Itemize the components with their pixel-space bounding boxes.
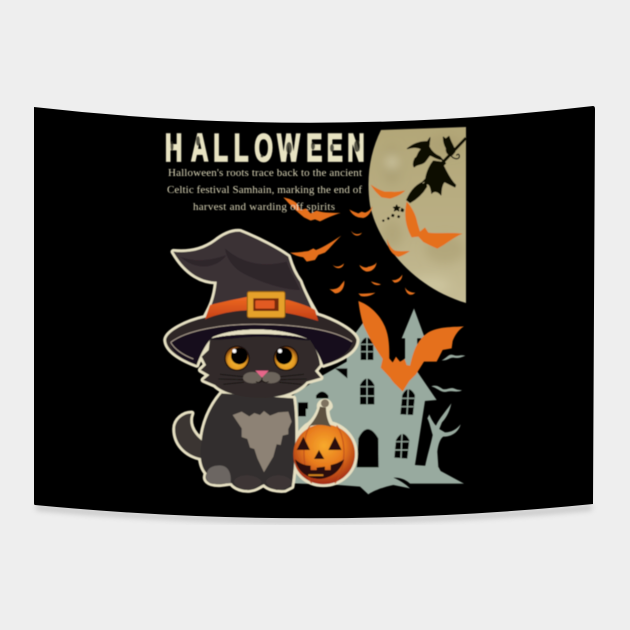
sticker outline (166, 232, 357, 490)
hat shadow on head (210, 334, 310, 340)
small bats (329, 231, 415, 296)
witch hat cone (173, 232, 317, 320)
head (201, 334, 321, 398)
jack-o-lantern face (295, 437, 344, 479)
tapestry panel (34, 106, 595, 518)
title: HALLOWEEN (165, 126, 365, 169)
title distress marks (170, 136, 360, 158)
dormer shadow (335, 368, 347, 378)
door (357, 429, 379, 467)
brim underside (170, 324, 353, 365)
hat brim (166, 308, 357, 365)
bat (290, 236, 341, 262)
bats (283, 185, 463, 296)
brim highlight (171, 324, 352, 359)
description text: harvest and warding off spirits (193, 201, 335, 213)
bat (371, 185, 405, 199)
buckle (247, 292, 285, 318)
left eye (224, 346, 250, 371)
stem (309, 407, 331, 427)
sparkle dust (383, 205, 404, 221)
description text: Halloween's roots trace back to the ancient (168, 167, 362, 179)
moon craters (382, 135, 465, 293)
hat band (205, 297, 318, 321)
house silhouette (293, 308, 464, 494)
pumpkin ribs (304, 426, 344, 483)
small window behind cat (298, 402, 308, 416)
witch figure (407, 138, 456, 195)
mouth and whiskers (218, 374, 307, 384)
window lattice (360, 337, 415, 458)
witch's cat (443, 136, 455, 155)
body (201, 393, 295, 490)
chest fur (233, 411, 292, 472)
right eye (273, 346, 299, 371)
witch on broom (383, 136, 466, 221)
moon (368, 127, 466, 303)
pumpkin body (293, 424, 355, 484)
bat (387, 239, 410, 257)
hat folds (180, 248, 300, 290)
cat and pumpkin illustration (166, 232, 357, 490)
bat (405, 202, 463, 249)
windows (316, 337, 415, 467)
tapestry shadow (36, 505, 592, 523)
artwork (165, 126, 466, 494)
tail (175, 413, 203, 458)
pumpkin (293, 399, 355, 484)
haunted house (293, 308, 465, 494)
nose (255, 371, 269, 378)
description text: Celtic festival Samhain, marking the end of (167, 184, 362, 196)
broom (407, 138, 466, 203)
mist wisps (431, 355, 465, 392)
muzzle (243, 372, 280, 383)
cat tail (450, 154, 459, 159)
paws (206, 466, 292, 490)
dead tree (425, 403, 461, 467)
large bat over house (358, 301, 464, 392)
bat (349, 206, 373, 218)
infographic canvas (34, 106, 595, 525)
description text (167, 167, 362, 213)
bat (283, 197, 341, 221)
